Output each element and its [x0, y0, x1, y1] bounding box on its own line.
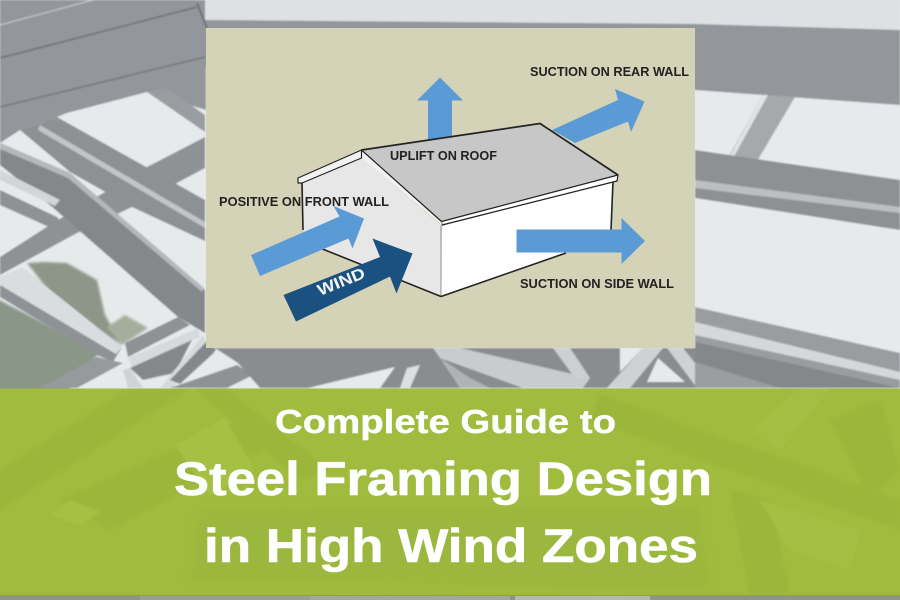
- arrow: suction on rear wall: [552, 89, 644, 143]
- label: wind: WIND: [315, 265, 368, 300]
- label: suction on rear wall: SUCTION ON REAR WALL: [530, 65, 689, 79]
- green title band: [0, 388, 900, 595]
- trees at lower left: [0, 262, 148, 400]
- label: uplift on roof: UPLIFT ON ROOF: [390, 149, 497, 163]
- arrow: suction on side wall: [516, 218, 645, 264]
- panel: wind pressure diagram: [206, 28, 695, 348]
- house: [298, 124, 618, 296]
- title line 2: Steel Framing Design: [174, 452, 712, 505]
- arrow: uplift on roof: [417, 78, 463, 140]
- label: suction on side wall: SUCTION ON SIDE WALL: [520, 277, 674, 291]
- label: positive on front wall: POSITIVE ON FRONT WALL: [219, 195, 389, 209]
- bottom photo strip: [0, 595, 900, 600]
- title line 1: Complete Guide to: [275, 403, 616, 440]
- arrow: positive on front wall: [251, 206, 364, 276]
- arrow: wind: [284, 238, 412, 322]
- title line 3: in High Wind Zones: [204, 519, 698, 572]
